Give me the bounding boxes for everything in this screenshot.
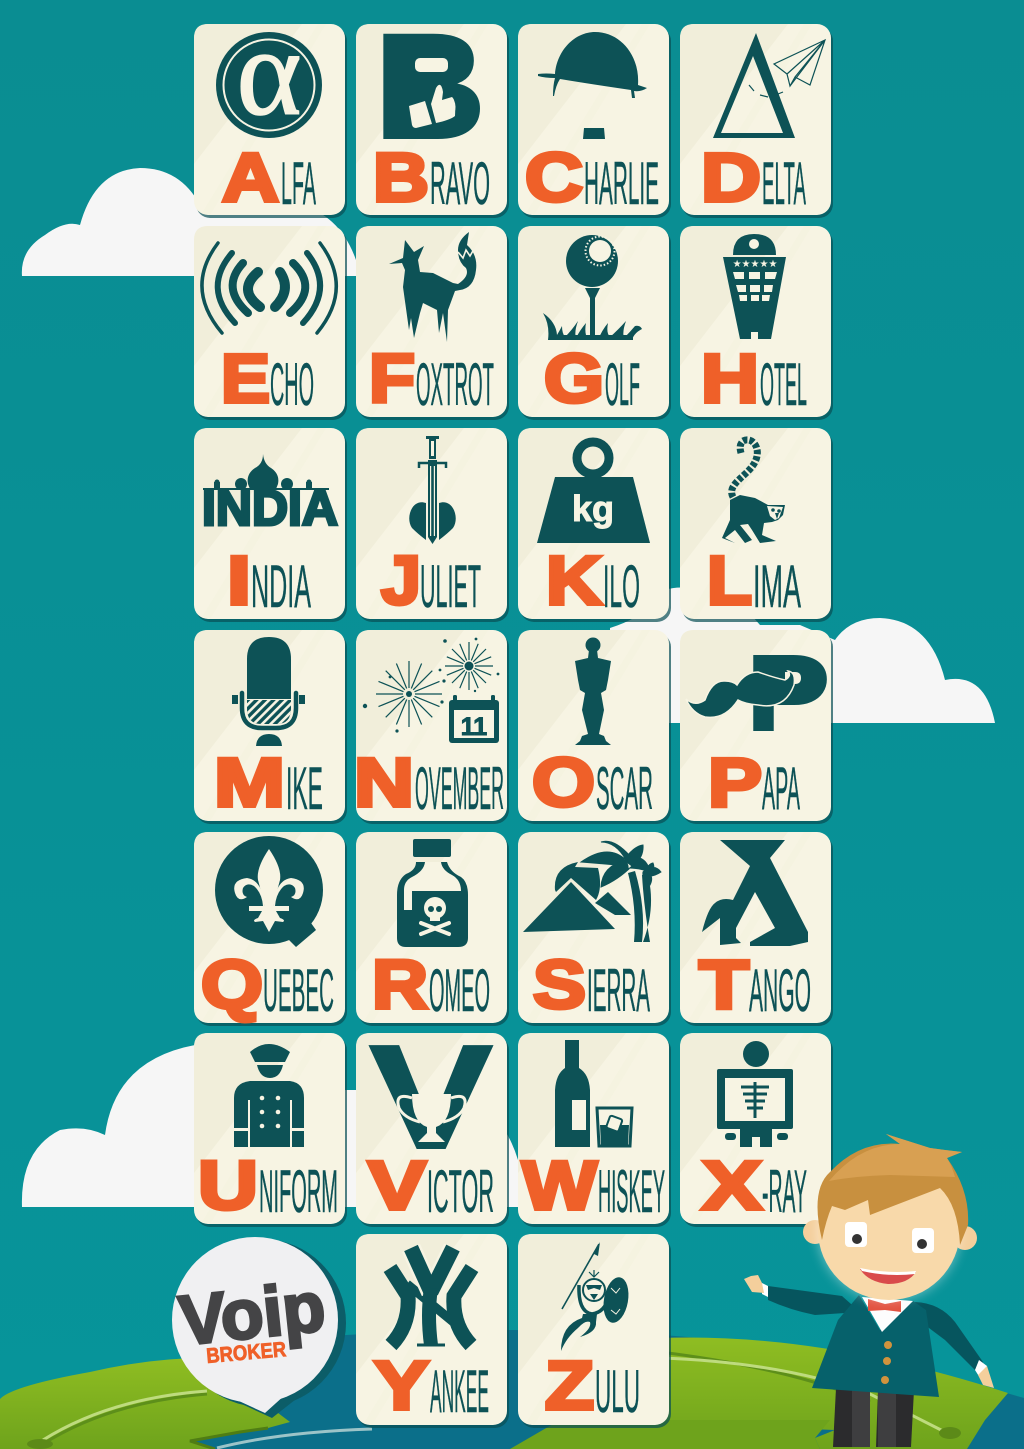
icon: mountains and palm [523, 841, 661, 942]
icon: sound waves [202, 243, 336, 333]
card: Foxtrot [356, 226, 509, 420]
text: IERRA [587, 957, 650, 1024]
label: Romeo [372, 946, 490, 1024]
icon: letter V with trophy: V [369, 1015, 493, 1180]
text: UEBEC [263, 957, 334, 1024]
card: Sierra [518, 832, 671, 1026]
label: Whiskey: W [522, 1147, 598, 1224]
card: India [194, 428, 347, 622]
logo wordmark: Voip: Voip [175, 1267, 329, 1360]
character: jacket [812, 1295, 939, 1397]
card: Golf: OLF [605, 351, 640, 418]
text: HISKEY [598, 1158, 665, 1225]
icon: letter P with moustache [686, 632, 830, 753]
card: Lima: IMA [753, 553, 801, 620]
label: Charlie [525, 139, 659, 217]
label: Foxtrot: F [369, 340, 415, 417]
logo: Voip Broker bubble [172, 1237, 346, 1418]
ground: right island [510, 1337, 1008, 1449]
card: Hotel [680, 226, 833, 420]
card: Yankee [356, 1234, 509, 1428]
card: Charlie [518, 24, 671, 218]
text: OXTROT [416, 351, 494, 418]
label: X-ray [702, 1147, 807, 1225]
ground: left island [0, 1358, 372, 1449]
label: Quebec: Q [201, 946, 263, 1023]
icon: microphone [232, 637, 305, 746]
label: Mike: M [214, 744, 285, 821]
label: Victor [368, 1147, 494, 1225]
text: ANGO [749, 957, 811, 1024]
icon: bowler hat and moustache [538, 32, 647, 139]
label: Sierra: S [533, 946, 586, 1023]
label: Golf [544, 340, 640, 418]
icon: whiskey bottle and glass [555, 1040, 632, 1147]
label: Bravo: B [373, 139, 429, 216]
text: RAVO [430, 150, 490, 217]
label: Romeo: R [372, 946, 428, 1023]
label: November: N [354, 744, 414, 821]
label: Papa [708, 744, 800, 822]
label: Papa: P [708, 744, 762, 821]
icon: alpha badge: α [237, 4, 301, 141]
card: Tango [680, 832, 833, 1026]
label: Echo: E [221, 340, 270, 417]
card: Quebec [194, 832, 347, 1026]
icon: triangle and paper plane [713, 33, 825, 138]
label: Charlie: C [525, 139, 583, 216]
card: Juliet [356, 428, 509, 622]
card: Echo: CHO [270, 351, 314, 418]
label: Hotel: H [701, 340, 759, 417]
label: November [354, 744, 504, 822]
icon: golf ball on tee [543, 235, 642, 340]
card: Alfa: LFA [281, 150, 316, 217]
card: Golf [518, 226, 671, 420]
label: Kilo: K [546, 542, 602, 619]
label: Mike [214, 744, 323, 822]
card: Alfa [194, 4, 347, 218]
card: Juliet: ULIET [420, 553, 481, 620]
cloud: right [610, 588, 995, 723]
label: Whiskey [522, 1147, 665, 1225]
icon: hotel tower [723, 234, 786, 339]
card: Papa: APA [762, 755, 800, 822]
card: Whiskey [518, 1033, 671, 1227]
card: Mike [194, 630, 347, 824]
label: Delta [701, 139, 806, 217]
label: Echo [221, 340, 314, 418]
icon: Q with fleur-de-lys [215, 836, 323, 947]
character: arms [744, 1275, 994, 1388]
icon: X-shaped legs [702, 840, 808, 946]
card: Uniform [194, 1033, 347, 1227]
label: Foxtrot [369, 340, 494, 418]
label: Juliet: J [381, 542, 421, 619]
icon: fireworks and calendar: 11 [461, 713, 487, 741]
icon: kg weight: kg [572, 488, 614, 529]
label: Oscar: O [532, 744, 595, 821]
text: SCAR [596, 755, 653, 822]
card: Delta [680, 24, 833, 218]
label: Lima [707, 542, 801, 620]
text: OTEL [760, 351, 807, 418]
label: Victor: V [368, 1147, 426, 1224]
label: Quebec [201, 946, 334, 1024]
card: Kilo [518, 428, 671, 622]
icon: kg weight [537, 442, 650, 543]
label: Uniform: U [198, 1147, 258, 1224]
label: Juliet [381, 542, 481, 620]
label: India: I [227, 542, 251, 619]
icon: letter P with moustache: P [746, 632, 830, 753]
card: November [354, 630, 509, 824]
label: Yankee: Y [374, 1347, 429, 1424]
label: Yankee [374, 1347, 489, 1425]
icon: India wordmark with dome [202, 454, 338, 536]
card: Bravo [356, 2, 509, 218]
label: Tango: T [699, 946, 749, 1023]
logo wordmark: Broker: BROKER [205, 1338, 287, 1368]
text: OVEMBER [415, 755, 504, 822]
icon: statuette [575, 638, 611, 745]
card: Victor [356, 1015, 509, 1227]
label: Oscar [532, 744, 653, 822]
label: Delta: D [701, 139, 761, 216]
text: NIFORM [259, 1158, 338, 1225]
card: Mike: IKE [286, 755, 323, 822]
label: Zulu [545, 1347, 640, 1425]
ground: water [0, 1330, 1024, 1449]
card: India: NDIA [251, 553, 311, 620]
icon: hotel tower: ★★★★★ [733, 259, 777, 270]
icon: interlocking team logo [390, 1248, 472, 1345]
card: Lima [680, 428, 833, 622]
icon: sword and heart [409, 436, 456, 544]
label: Bravo [373, 139, 490, 217]
cloud: top left [22, 168, 356, 276]
label: Sierra [533, 946, 650, 1024]
character: presenter [744, 1134, 994, 1447]
card: Delta: ELTA [762, 150, 806, 217]
character: head [803, 1134, 977, 1300]
card: Romeo [356, 832, 509, 1026]
label: X-ray: X [702, 1147, 762, 1224]
card: Papa [680, 630, 833, 824]
icon: fox [389, 232, 476, 342]
icon: fireworks and calendar [363, 638, 499, 743]
icon: poison bottle [397, 839, 468, 947]
text: HARLIE [584, 150, 659, 217]
label: India [227, 542, 311, 620]
label: Uniform [198, 1147, 338, 1225]
icon: Zulu warrior [561, 1242, 632, 1351]
card: Zulu: ULU [595, 1358, 640, 1425]
icon: alpha badge [216, 4, 322, 141]
label: Lima: L [707, 542, 752, 619]
label: Hotel [701, 340, 807, 418]
text: ANKEE [430, 1358, 489, 1425]
card: Oscar [518, 630, 671, 824]
character: trousers [833, 1388, 914, 1447]
text: OMEO [429, 957, 490, 1024]
label: Kilo [546, 542, 640, 620]
label: Zulu: Z [545, 1347, 594, 1424]
label: Alfa: A [222, 139, 279, 216]
card: X-ray [680, 1033, 833, 1227]
card: Zulu [518, 1234, 671, 1428]
cloud: lower left [22, 1045, 518, 1207]
label: Alfa [222, 139, 316, 217]
text: ICTOR [427, 1158, 494, 1225]
icon: x-ray screen [717, 1041, 793, 1147]
icon: lemur [722, 440, 785, 543]
card: Echo [194, 226, 347, 420]
icon: uniformed officer [234, 1044, 304, 1147]
label: Golf: G [544, 340, 604, 417]
card: X-ray: -RAY [762, 1158, 807, 1225]
icon: letter B with thumbs up: B [374, 2, 486, 170]
card: Kilo: ILO [603, 553, 640, 620]
icon: India wordmark with dome: INDIA [202, 480, 338, 536]
label: Tango [699, 946, 811, 1024]
